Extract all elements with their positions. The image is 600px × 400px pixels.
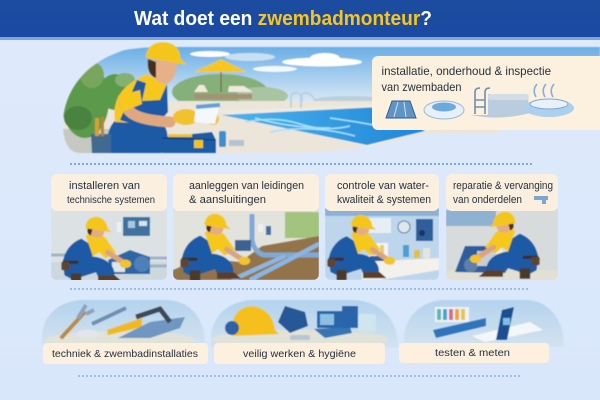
panel: techniek — [42, 300, 208, 364]
icon: pipe — [534, 196, 548, 204]
tools illustration — [42, 300, 205, 349]
label — [214, 343, 385, 364]
card 3 label: controle van water- — [337, 180, 429, 192]
card 3 label: kwaliteit & systemen — [337, 194, 431, 206]
label: veilig werken & hygiëne — [243, 348, 356, 360]
sun loungers — [194, 85, 253, 92]
header banner — [0, 0, 600, 40]
card 3 label — [325, 174, 439, 211]
card 2 label: aanleggen van leidingen — [189, 180, 304, 192]
panel text: van zwembaden — [382, 80, 462, 94]
umbrella — [220, 68, 222, 92]
card 4 label: reparatie & vervanging — [453, 180, 553, 192]
panel: leidingen — [173, 174, 319, 281]
label: testen & meten — [435, 347, 510, 359]
hero illustration: pool and technician — [60, 42, 600, 156]
card 3 image — [325, 208, 439, 280]
card 1 label: installeren van — [69, 180, 140, 192]
card 4 image — [446, 208, 558, 280]
panel: reparatie — [446, 174, 558, 280]
deck — [60, 101, 500, 156]
chemical bottle and tablets — [219, 131, 244, 147]
trees — [61, 62, 135, 138]
panel: veilig werken — [211, 300, 398, 364]
card 2 image — [173, 208, 319, 281]
panel text — [382, 64, 551, 94]
panel: testen — [399, 300, 564, 363]
panel: installeren — [51, 174, 167, 284]
dotted divider — [78, 375, 520, 377]
panel text: installatie, onderhoud & inspectie — [382, 64, 551, 78]
checklist card — [194, 103, 220, 124]
title: Wat doet een zwembadmonteur? — [134, 8, 432, 30]
pool water — [218, 104, 430, 147]
card 1 label: technische systemen — [67, 194, 155, 206]
tool bucket — [91, 117, 111, 153]
card 4 label — [446, 174, 558, 211]
card 2 label — [173, 174, 319, 211]
card 4 label: van onderdelen — [453, 194, 522, 206]
label: techniek & zwembadinstallaties — [52, 348, 198, 360]
icon: ladder and hot tub — [470, 88, 530, 118]
toolbox — [162, 132, 216, 153]
icon: solar panel — [386, 101, 416, 118]
dotted divider — [70, 288, 530, 290]
card 2 label: & aansluitingen — [189, 194, 266, 206]
icon: pool robot — [424, 101, 464, 119]
dotted divider — [70, 163, 532, 165]
technician — [107, 42, 220, 153]
panel: pool services — [372, 56, 600, 130]
pool ladder — [291, 93, 316, 108]
testing illustration — [404, 300, 564, 347]
panel: controle — [325, 174, 439, 280]
card 1 label — [51, 174, 167, 211]
safety gear illustration — [211, 300, 398, 348]
label — [399, 343, 549, 363]
icon: spa — [524, 84, 574, 117]
card 1 image — [51, 208, 167, 284]
label — [43, 343, 208, 364]
